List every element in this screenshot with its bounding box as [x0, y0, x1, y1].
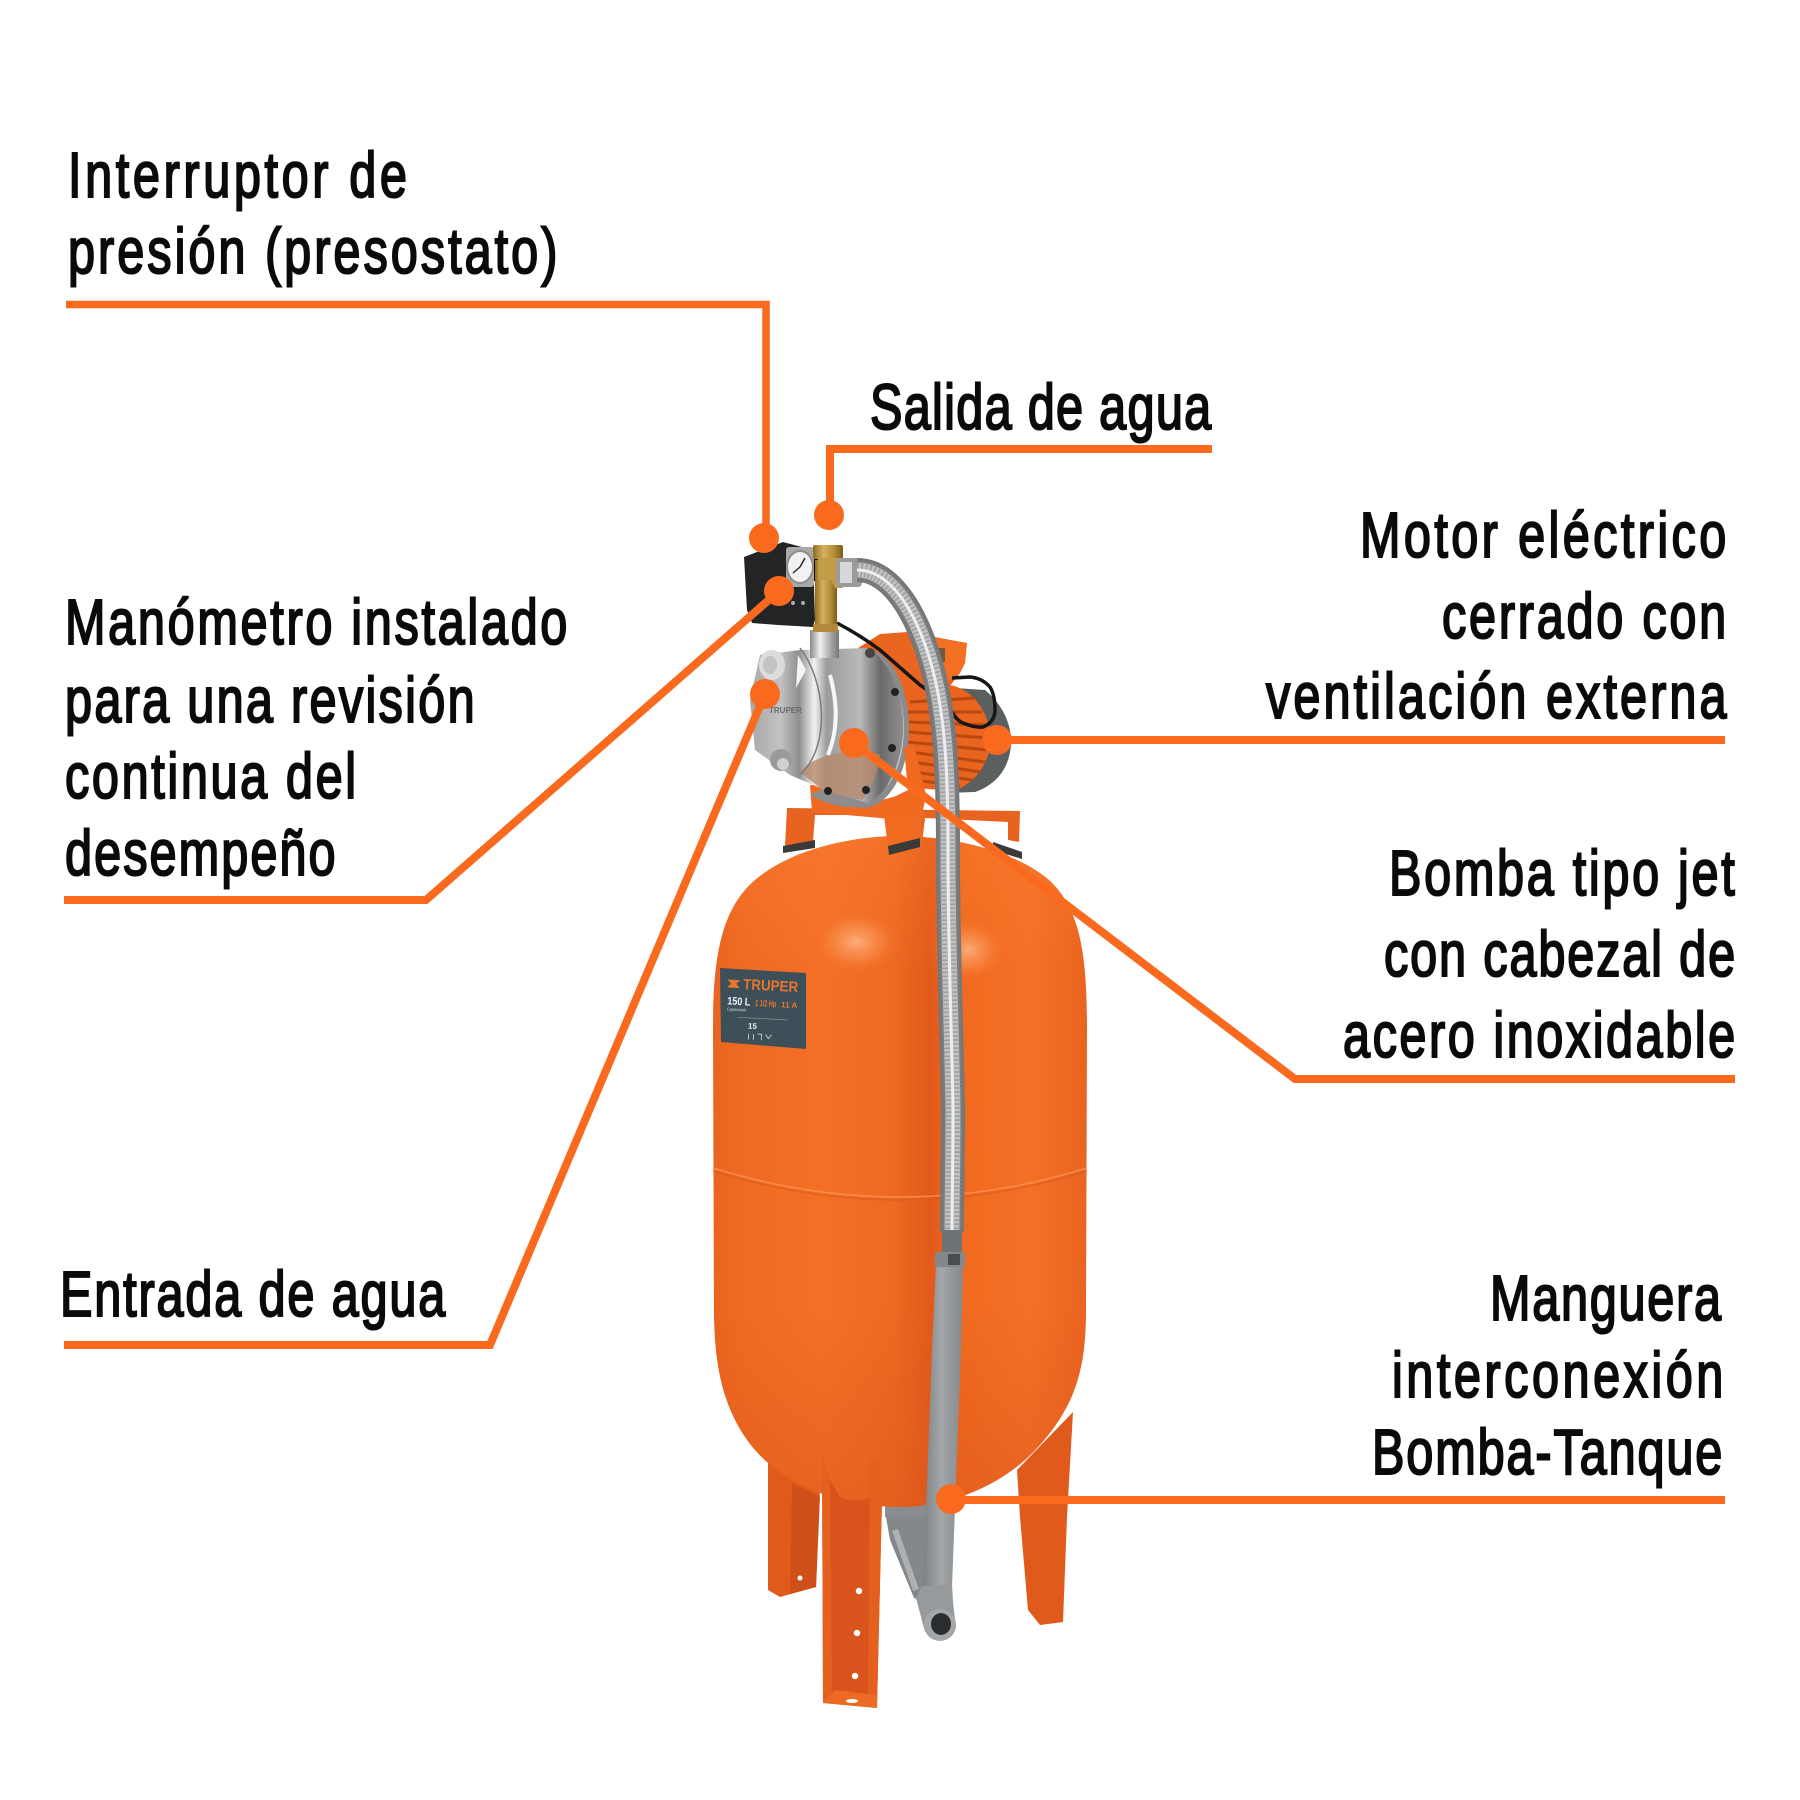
stainless pump head [750, 648, 909, 808]
label text: Manguera [1490, 1264, 1721, 1335]
leader line [64, 591, 779, 900]
leader line [830, 449, 1212, 515]
product illustration: pump and tank [713, 542, 1087, 1708]
stainless pump head: TRUPER [769, 706, 802, 715]
braided hose [857, 570, 953, 1232]
label text [1266, 501, 1727, 733]
front leg [822, 1457, 882, 1708]
anchor dot [982, 725, 1012, 755]
label text [65, 588, 567, 890]
label text: Bomba-Tanque [1372, 1418, 1722, 1489]
label text: Manómetro instalado [65, 588, 567, 659]
label text: Interruptor de [68, 141, 407, 212]
tank label: TRUPER [743, 976, 799, 996]
tank label: 150 L [727, 995, 751, 1009]
label text: ventilación externa [1266, 662, 1727, 733]
anchor dot [749, 523, 779, 553]
leader line [951, 1496, 1725, 1504]
leader line [64, 694, 765, 1345]
lower inlet pipe [885, 1505, 927, 1602]
label text: acero inoxidable [1343, 1001, 1735, 1072]
leader line [854, 743, 1735, 1079]
tank label: 11 A [781, 1000, 798, 1010]
label text [68, 141, 557, 288]
anchor dot [936, 1484, 966, 1514]
label text [1372, 1264, 1723, 1489]
label text [1343, 839, 1735, 1072]
tank label: Capacidad [727, 1006, 746, 1012]
label text: Entrada de agua [60, 1260, 446, 1331]
brass tee and stem [810, 545, 862, 658]
tank rear legs [768, 1412, 1073, 1625]
motor support column [884, 745, 926, 815]
label text: con cabezal de [1384, 920, 1735, 991]
leader line [66, 304, 766, 538]
tank label: 1 1/2 Hp [755, 998, 777, 1009]
label text: presión (presostato) [68, 217, 557, 288]
leader line [997, 736, 1725, 744]
label text: para una revisión [65, 666, 475, 737]
callout: manómetro [64, 576, 794, 900]
pressure switch with gauge [744, 542, 822, 627]
motor [837, 623, 1011, 793]
callout: motor eléctrico [982, 501, 1727, 755]
anchor dot [764, 576, 794, 606]
callout: manguera interconexión [936, 1264, 1725, 1514]
label text: Bomba tipo jet [1389, 839, 1735, 910]
label text: Salida de agua [870, 373, 1212, 444]
tank label: 15 [748, 1022, 758, 1031]
connection pipe and elbow [916, 1230, 965, 1641]
tank label [720, 968, 806, 1049]
label text: desempeño [65, 819, 336, 890]
label text: continua del [65, 742, 356, 813]
callout: interruptor de presión [66, 141, 779, 553]
anchor dot [814, 500, 844, 530]
tank body [713, 836, 1087, 1507]
callout: entrada de agua [60, 679, 780, 1345]
label text: cerrado con [1442, 582, 1726, 653]
callout: bomba tipo jet [839, 728, 1735, 1079]
label text: interconexión [1392, 1341, 1723, 1412]
label text: Motor eléctrico [1360, 501, 1726, 572]
anchor dot [839, 728, 869, 758]
anchor dot [750, 679, 780, 709]
callout: salida de agua [814, 373, 1212, 530]
pump stand [783, 785, 1022, 859]
